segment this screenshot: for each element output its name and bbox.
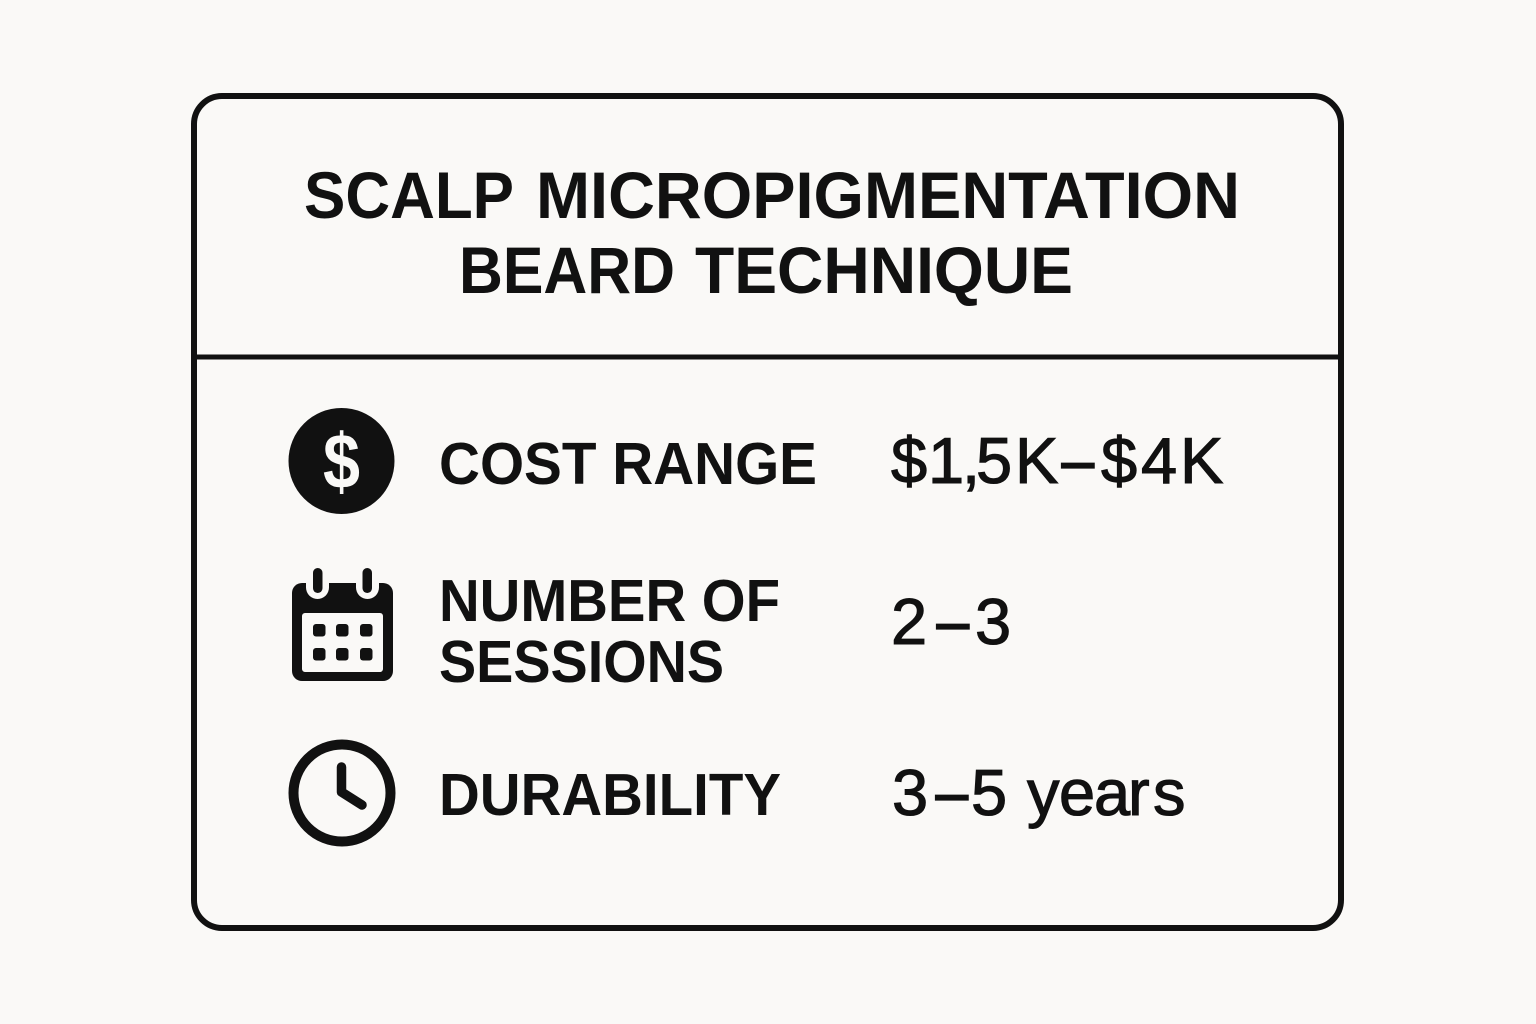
icon: calendar [292, 562, 393, 681]
title: TECHNIQUE [695, 233, 1073, 307]
title: SCALP [304, 158, 514, 232]
title: BEARD [459, 233, 675, 307]
label: cost range: COST RANGE [439, 431, 817, 497]
icon: dollar coin: $ [323, 417, 360, 505]
value: cost range: $4K [1101, 424, 1223, 497]
value: durability: years [1027, 756, 1186, 829]
row: cost range [288, 408, 1223, 514]
label: number of sessions [439, 568, 780, 695]
value: cost range: – [1062, 429, 1094, 493]
label: number of sessions: SESSIONS [439, 629, 724, 695]
row: durability [294, 744, 1186, 842]
value: durability: 5 [971, 756, 1007, 829]
icon: dollar coin [288, 408, 394, 514]
row: number of sessions [292, 562, 1011, 695]
value: number of sessions: – [937, 590, 969, 654]
value: durability: 3 [892, 756, 928, 829]
icon: clock [294, 744, 390, 842]
title: MICROPIGMENTATION [536, 158, 1240, 232]
title [304, 158, 1240, 307]
value: number of sessions: 3 [975, 585, 1011, 658]
value: number of sessions: 2 [891, 585, 927, 658]
value: cost range: $1,5K [891, 424, 1058, 497]
panel: card [194, 96, 1341, 928]
label: durability: DURABILITY [439, 762, 781, 828]
label: number of sessions: NUMBER OF [439, 568, 780, 634]
value: durability: – [936, 761, 968, 825]
